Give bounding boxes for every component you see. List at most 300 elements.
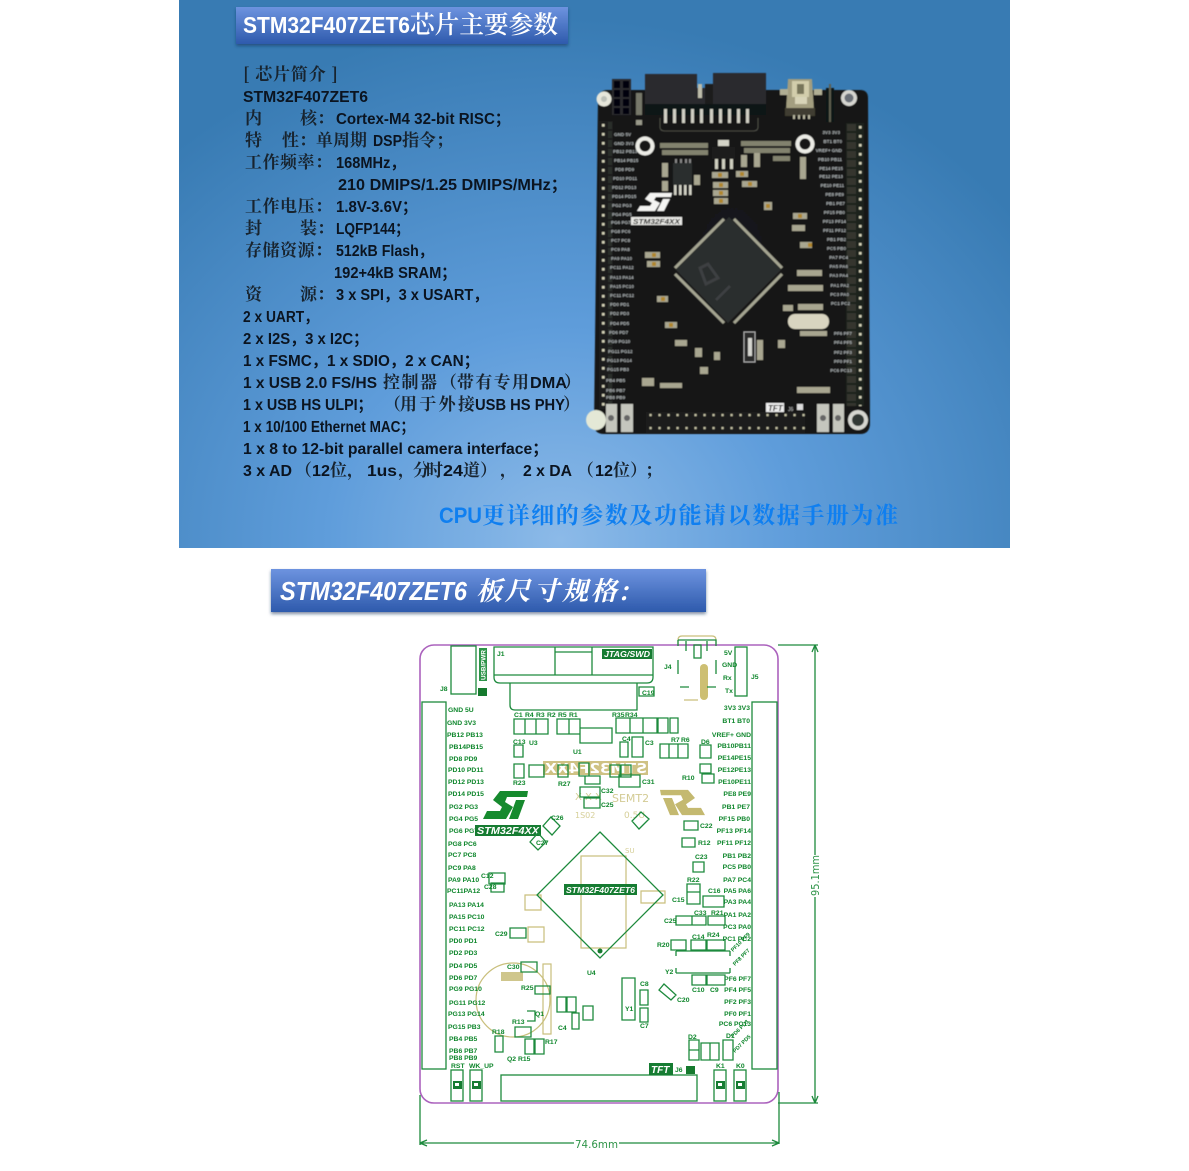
right header outline xyxy=(752,702,777,1069)
note: refer to the datasheet: 更详细的参数及功能请以数据手册为准 xyxy=(482,497,898,530)
left pin labels: PC7 PC8 xyxy=(611,238,631,243)
J5 connector: 5V xyxy=(724,650,733,657)
left pin labels: PG4 PG5 xyxy=(612,212,632,217)
text block: chip specifications: 性：单周期 xyxy=(282,126,367,151)
component reference labels: C1 xyxy=(514,712,523,719)
four-pin header xyxy=(826,84,834,122)
text block: chip specifications: 装： xyxy=(300,214,334,239)
component reference labels: R17 xyxy=(545,1039,558,1046)
text block: chip specifications: ； xyxy=(645,456,662,481)
right pin labels xyxy=(816,130,852,373)
text block: chip specifications: 2 x DA xyxy=(523,463,572,480)
left pin labels: PD4 PD5 xyxy=(449,963,478,970)
JTAG connector outline xyxy=(494,647,653,710)
left pin labels: PD6 PD7 xyxy=(449,975,478,982)
component reference labels: C4 xyxy=(622,736,631,743)
right pin labels: PB10PB11 xyxy=(717,743,751,750)
left pin labels: PC11PA12 xyxy=(447,888,480,895)
component reference labels: C30 xyxy=(507,964,520,971)
text block: chip specifications: 3 x AD xyxy=(243,463,292,480)
component reference labels: R13 xyxy=(512,1019,525,1026)
panel: chip parameters xyxy=(179,0,1010,548)
title: board dimensions: 板尺寸规格: xyxy=(476,571,629,608)
component reference labels: D6 xyxy=(701,739,710,746)
component reference labels xyxy=(481,690,735,1063)
component footprints xyxy=(489,687,733,1060)
right pin labels: PC1 PC2 xyxy=(723,936,751,943)
left pin labels: PC11 PA12 xyxy=(610,265,634,270)
gold silkscreen ghost layer: SEMT2 xyxy=(612,792,649,805)
left pin labels: PD8 PD9 xyxy=(449,756,478,763)
tact switches xyxy=(606,404,844,432)
right pin labels: PF15 PB0 xyxy=(824,210,845,215)
text block: chip specifications: 位 xyxy=(613,456,630,481)
component reference labels: C26 xyxy=(551,815,564,822)
buttons: RST xyxy=(451,1063,465,1070)
left pin labels: PB4 PB5 xyxy=(606,378,626,383)
right pin labels: PB1 PE7 xyxy=(722,804,750,811)
right pin labels: PA3 PA4 xyxy=(830,273,848,278)
left pin labels: PA13 PA14 xyxy=(610,275,634,280)
component reference labels: C19 xyxy=(642,690,655,697)
J5 connector: Rx xyxy=(723,675,732,682)
socket header xyxy=(612,79,642,125)
component reference labels: Q1 xyxy=(535,1011,544,1018)
right pin labels: PA7 PC4 xyxy=(829,255,848,260)
left pin labels: PD14 PD15 xyxy=(612,194,637,199)
buttons: K1 xyxy=(716,1063,725,1070)
main chip outline: STM32F407ZET6 xyxy=(566,885,635,895)
right pin labels: BT1 BT0 xyxy=(722,718,750,725)
gold silkscreen ghost layer: STM32F4XX xyxy=(545,762,647,777)
right pin labels: PF6 PF7 xyxy=(724,976,751,983)
text block: chip specifications: （ xyxy=(577,456,594,481)
right pin labels: PC5 PB0 xyxy=(723,864,751,871)
right pin labels: VREF+ GND xyxy=(816,148,843,153)
left pin labels: PC9 PA8 xyxy=(448,865,476,872)
gold silkscreen ghost layer: SU xyxy=(625,847,635,855)
J5 connector: Tx xyxy=(725,688,733,695)
left header outline xyxy=(422,702,446,1069)
left pin labels: GND 5V xyxy=(614,132,632,137)
left pin labels: PG9 PG10 xyxy=(608,339,631,344)
ST logo xyxy=(483,791,528,819)
left pin labels: PD2 PD3 xyxy=(610,311,630,316)
right pin labels xyxy=(712,705,752,1054)
right pin header xyxy=(846,123,864,406)
text block: chip specifications: STM32F407ZET6 xyxy=(243,89,368,106)
text block: chip specifications xyxy=(243,60,662,481)
component reference labels: C4 xyxy=(558,1025,567,1032)
text block: chip specifications: 指令； xyxy=(402,126,453,151)
left pin labels: PA9 PA10 xyxy=(448,877,479,884)
JTAG connector outline: JTAG/SWD xyxy=(604,650,650,659)
TFT label: TFT xyxy=(651,1065,670,1076)
left pin labels: PD8 PD9 xyxy=(615,167,635,172)
right pin labels: PE8 PE9 xyxy=(723,791,751,798)
component reference labels: C23 xyxy=(695,854,708,861)
text block: chip specifications: 工作电压： xyxy=(245,192,332,217)
text block: chip specifications: 封 xyxy=(245,214,262,239)
right pin labels: PF10 PF9 xyxy=(730,932,752,953)
J5 connector: GND xyxy=(722,662,737,669)
right pin labels: PF0 PF1 xyxy=(724,1011,751,1018)
text block: chip specifications: 特 xyxy=(245,126,262,151)
right pin labels: PF13 PF14 xyxy=(717,828,751,835)
component reference labels: R21 xyxy=(711,910,724,917)
J8 connector xyxy=(440,646,488,696)
left pin labels: PG15 PB3 xyxy=(607,367,629,372)
component reference labels: D2 xyxy=(688,1034,697,1041)
right pin labels: PE12 PE13 xyxy=(819,174,843,179)
text block: chip specifications: 192+4kB SRAM； xyxy=(334,265,456,282)
right pin labels: PB1 PE7 xyxy=(826,201,845,206)
J5 connector xyxy=(722,647,759,696)
note: refer to the datasheet: CPU xyxy=(439,503,482,528)
crystal xyxy=(788,314,829,329)
left pin labels: PD0 PD1 xyxy=(610,302,630,307)
TFT label xyxy=(766,403,803,413)
text block: chip specifications: DSP xyxy=(373,133,402,150)
right pin labels: PF11 PF12 xyxy=(717,840,751,847)
component reference labels: C25 xyxy=(664,918,677,925)
component reference labels: C25 xyxy=(601,802,614,809)
component reference labels: R5 xyxy=(558,712,567,719)
right pin labels: PE14PE15 xyxy=(718,755,751,762)
left pin labels: PA13 PA14 xyxy=(449,902,484,909)
text block: chip specifications: [ 芯片简介 ] xyxy=(243,60,338,85)
left pin labels: PG6 PG7 xyxy=(449,828,478,835)
component reference labels: C28 xyxy=(484,884,497,891)
component reference labels: C14 xyxy=(692,934,705,941)
mounting holes xyxy=(586,90,868,430)
text block: chip specifications: ） xyxy=(630,456,647,481)
text block: chip specifications: ， xyxy=(500,456,517,481)
right pin labels: PC6 PC13 xyxy=(719,1021,751,1028)
left pin labels: PG11 PG12 xyxy=(449,1000,485,1007)
right pin labels: PC3 PA0 xyxy=(723,924,751,931)
right pin labels: PA5 PA6 xyxy=(830,264,848,269)
photo: STM32F407ZET6 development board xyxy=(586,73,870,434)
buttons: K0 xyxy=(736,1063,745,1070)
left pin labels: PG6 PG7 xyxy=(611,220,631,225)
right pin labels: BT1 BT0 xyxy=(823,139,842,144)
right pin labels: PA1 PA2 xyxy=(831,283,849,288)
text block: chip specifications: 1 x 8 to 12-bit parallel camera interface； xyxy=(243,441,548,458)
right pin labels: PF8 PF7 xyxy=(732,948,752,967)
left pin labels: PC11 PC12 xyxy=(610,293,634,298)
text block: chip specifications: 24 xyxy=(443,463,463,480)
diagram: board layout drawing xyxy=(420,636,822,1151)
ST logo xyxy=(637,193,672,211)
left pin labels: PB12 PB13 xyxy=(447,732,483,739)
component reference labels: C15 xyxy=(672,897,685,904)
right pin labels: PF11 PF12 xyxy=(823,228,846,233)
voltage regulator xyxy=(712,140,735,169)
component reference labels: C7 xyxy=(640,1023,649,1030)
dimension: width 74.6 mm xyxy=(420,1092,779,1151)
dimension: width 74.6 mm: 74.6mm xyxy=(575,1138,618,1151)
component reference labels: C31 xyxy=(642,779,655,786)
left pin labels: PD0 PD1 xyxy=(449,938,478,945)
text block: chip specifications: LQFP144； xyxy=(336,221,409,238)
right pin labels: PF2 PF3 xyxy=(834,350,852,355)
text block: chip specifications: 2 x UART， xyxy=(243,309,318,326)
right pin labels: PC1 PC2 xyxy=(831,301,850,306)
left pin labels: PD12 PD13 xyxy=(448,779,484,786)
component reference labels: U3 xyxy=(529,740,538,747)
right pin labels: PB1 PB2 xyxy=(827,237,846,242)
component reference labels: R6 xyxy=(681,737,690,744)
component reference labels: C10 xyxy=(692,987,705,994)
bottom header outline xyxy=(501,1075,697,1101)
right pin labels: VREF+ GND xyxy=(712,732,751,739)
right pin labels: PF2 PF3 xyxy=(724,999,751,1006)
right pin labels: PF6 PF7 xyxy=(834,331,852,336)
STM32F4XX label: STM32F4XX xyxy=(477,826,540,837)
TFT label: J6 xyxy=(788,407,794,413)
left pin labels: PC9 PA8 xyxy=(611,247,630,252)
main chip outline xyxy=(537,832,663,977)
right pin labels: PB1 PB2 xyxy=(723,853,751,860)
J8 connector: USB/PWR xyxy=(482,649,488,680)
text block: chip specifications: 道 xyxy=(463,456,480,481)
component reference labels: C9 xyxy=(710,987,719,994)
dimension: height 95.1 mm: 95.1mm xyxy=(809,855,822,896)
right pin labels: PF4 PF5 xyxy=(724,987,751,994)
left pin labels: PG8 PC6 xyxy=(448,841,477,848)
left pin labels: PG13 PG14 xyxy=(607,358,632,363)
component reference labels: C22 xyxy=(700,823,713,830)
left pin labels: PA15 PC10 xyxy=(449,914,485,921)
right pin labels: PE12PE13 xyxy=(718,767,751,774)
right pin labels: PE8 PE9 xyxy=(825,192,844,197)
left pin labels: PB4 PB5 xyxy=(449,1036,478,1043)
right pin labels: PE14 PE15 xyxy=(819,166,843,171)
left pin labels: PB14 PB15 xyxy=(614,158,639,163)
left pin labels: PC11 PC12 xyxy=(449,926,485,933)
mini USB outline xyxy=(664,640,716,687)
left pin labels: PD10 PD11 xyxy=(613,176,637,181)
text block: chip specifications: 1.8V-3.6V； xyxy=(336,199,417,216)
mini USB connector xyxy=(780,79,822,119)
text block: chip specifications: （ xyxy=(440,368,457,393)
text block: chip specifications: 源： xyxy=(300,280,334,305)
component reference labels: C3 xyxy=(645,740,654,747)
right pin labels: PA7 PC4 xyxy=(723,877,751,884)
left pin labels: PB8 PB9 xyxy=(449,1055,478,1062)
component reference labels: C27 xyxy=(536,840,549,847)
title: chip main parameters xyxy=(236,6,568,44)
left pin labels: PG2 PG3 xyxy=(612,203,632,208)
JTAG connector xyxy=(645,73,766,131)
component reference labels: R22 xyxy=(687,877,700,884)
component reference labels: R3 xyxy=(536,712,545,719)
left pin labels: PG11 PG12 xyxy=(608,349,633,354)
right pin labels: PA1 PA2 xyxy=(724,912,751,919)
main chip xyxy=(675,217,782,323)
left pin labels: PB12 PB13 xyxy=(613,149,638,154)
right pin labels: PC5 PB0 xyxy=(827,246,846,251)
component reference labels: R24 xyxy=(707,932,720,939)
text block: chip specifications: 1us xyxy=(367,463,397,480)
right pin labels: 3V3 3V3 xyxy=(822,130,840,135)
text block: chip specifications: 2 x I2S，3 x I2C； xyxy=(243,331,368,348)
component reference labels: Q2 R15 xyxy=(507,1056,531,1063)
left pin labels: PG15 PB3 xyxy=(448,1024,481,1031)
text block: chip specifications: 核： xyxy=(300,104,334,129)
left pin labels: GND 5U xyxy=(448,707,474,714)
left pin labels: PD12 PD13 xyxy=(612,185,637,190)
left pin labels: PA15 PC10 xyxy=(610,284,634,289)
text block: chip specifications: 12 xyxy=(312,463,330,480)
JTAG connector outline: J1 xyxy=(497,651,505,658)
text block: chip specifications: 控制器 xyxy=(383,368,437,393)
text block: chip specifications: （ xyxy=(384,390,401,415)
text block: chip specifications: 资 xyxy=(245,280,264,305)
left pin labels: GND 3V3 xyxy=(614,141,634,146)
left pin labels: PB14PB15 xyxy=(449,744,483,751)
TFT label: J6 xyxy=(675,1067,683,1074)
J5 connector: J5 xyxy=(751,674,759,681)
text block: chip specifications: USB HS PHY xyxy=(475,397,565,414)
right pin labels: PF4 PF5 xyxy=(834,340,852,345)
left pin labels: PG2 PG3 xyxy=(449,804,478,811)
text block: chip specifications: 存储资源： xyxy=(245,236,332,261)
board label xyxy=(631,217,682,226)
left pin labels: PG9 PG10 xyxy=(449,986,482,993)
main chip outline: U4 xyxy=(587,970,596,977)
component reference labels: R25 xyxy=(521,985,534,992)
component reference labels: R4 xyxy=(525,712,534,719)
text block: chip specifications: 1 x FSMC，1 x SDIO，2 x CAN； xyxy=(243,353,479,370)
component reference labels: C16 xyxy=(708,888,721,895)
left pin labels: PC7 PC8 xyxy=(448,852,477,859)
text block: chip specifications: 1 x 10/100 Ethernet MAC； xyxy=(243,419,414,436)
right pin labels: PC3 PA0 xyxy=(830,292,849,297)
text block: chip specifications: 带有专用 xyxy=(456,368,529,393)
left pin labels: PD14 PD15 xyxy=(448,791,484,798)
text block: chip specifications: 3 x SPI，3 x USART， xyxy=(336,287,488,304)
buttons xyxy=(451,1063,746,1101)
text block: chip specifications: 512kB Flash， xyxy=(336,243,433,260)
gold silkscreen ghost layer: 1S02 xyxy=(575,811,595,820)
component reference labels: R2 xyxy=(547,712,556,719)
left pin labels: PD10 PD11 xyxy=(448,767,484,774)
right pin labels: PD7 PD5 xyxy=(732,1034,752,1054)
right pin labels: PC6 PC13 xyxy=(830,368,852,373)
component reference labels: C13 xyxy=(513,739,526,746)
right pin labels: PF15 PB0 xyxy=(719,816,750,823)
text block: chip specifications: ） xyxy=(480,456,497,481)
component reference labels: C32 xyxy=(601,788,614,795)
component reference labels: R35 xyxy=(612,712,625,719)
vertical crystal xyxy=(744,332,755,362)
component reference labels: C8 xyxy=(640,981,649,988)
text block: chip specifications: 分时 xyxy=(413,456,443,481)
component reference labels: C33 xyxy=(694,910,707,917)
component reference labels: C12 xyxy=(481,873,494,880)
left pin labels xyxy=(606,132,639,400)
text block: chip specifications: ， xyxy=(398,456,415,481)
left pin labels: PB6 PB7 xyxy=(449,1048,478,1055)
component reference labels: R10 xyxy=(682,775,695,782)
component reference labels: R20 xyxy=(657,942,670,949)
text block: chip specifications: 168MHz， xyxy=(336,155,405,172)
text block: chip specifications: ） xyxy=(563,390,580,415)
text block: chip specifications: ） xyxy=(564,368,581,393)
right pin labels: PE10 PE11 xyxy=(820,183,844,188)
text block: chip specifications: 内 xyxy=(245,104,262,129)
TFT label: TFT xyxy=(768,404,784,413)
text block: chip specifications: 1 x USB 2.0 FS/HS xyxy=(243,375,377,392)
text block: chip specifications: 210 DMIPS/1.25 DMIPS/MHz； xyxy=(338,177,567,194)
J8 connector: J8 xyxy=(440,686,448,693)
component reference labels: C20 xyxy=(677,997,690,1004)
text block: chip specifications: DMA xyxy=(530,375,567,392)
passive components xyxy=(642,141,830,393)
left pin labels: GND 3V3 xyxy=(447,720,476,727)
component reference labels: D1 xyxy=(726,1033,735,1040)
component reference labels: U1 xyxy=(573,749,582,756)
text block: chip specifications: （ xyxy=(295,456,312,481)
buttons: WK_UP xyxy=(469,1063,494,1070)
left pin labels: PD2 PD3 xyxy=(449,950,478,957)
component reference labels: R7 xyxy=(671,737,680,744)
title: chip main parameters: 芯片主要参数 xyxy=(409,6,559,41)
left pin labels: PG8 PC6 xyxy=(611,229,631,234)
component reference labels: R34 xyxy=(625,712,638,719)
gold silkscreen ghost layer: X X X xyxy=(575,792,602,803)
right pin labels: PA3 PA4 xyxy=(724,899,751,906)
left pin labels: PB6 PB7 xyxy=(606,388,626,393)
gold silkscreen ghost layer xyxy=(476,636,716,1037)
component reference labels: Y1 xyxy=(625,1006,634,1013)
component reference labels: Y2 xyxy=(665,969,674,976)
left pin labels xyxy=(447,707,485,1062)
title: board dimensions xyxy=(271,569,706,612)
left pin labels: PB8 PB9 xyxy=(606,395,626,400)
dimension: height 95.1 mm xyxy=(778,645,822,1103)
right pin labels: 3V3 3V3 xyxy=(724,705,750,712)
title: chip main parameters: STM32F407ZET6 xyxy=(243,12,410,38)
component reference labels: C29 xyxy=(495,931,508,938)
component reference labels: R27 xyxy=(558,781,571,788)
left pin header xyxy=(599,121,613,409)
left pin labels: PD6 PD7 xyxy=(609,330,629,335)
left pin labels: PG13 PG14 xyxy=(448,1011,485,1018)
left pin labels: PA9 PA10 xyxy=(611,256,632,261)
left pin labels: PD4 PD5 xyxy=(610,321,630,326)
TFT label xyxy=(649,1063,695,1076)
text block: chip specifications: 位， xyxy=(330,456,364,481)
right pin labels: PE10PE11 xyxy=(718,779,751,786)
bottom pin header xyxy=(646,412,805,433)
component reference labels: R12 xyxy=(698,840,711,847)
component reference labels: R1 xyxy=(569,712,578,719)
right pin labels: PA5 PA6 xyxy=(724,888,751,895)
gold silkscreen ghost layer: 0.5U xyxy=(624,811,645,821)
board label: STM32F4XX xyxy=(633,219,682,226)
mini USB outline: J4 xyxy=(664,664,672,671)
left pin labels: PG4 PG5 xyxy=(449,816,478,823)
board outline xyxy=(420,645,778,1103)
text block: chip specifications: 用于外接 xyxy=(400,390,476,415)
right pin labels: PF13 PF14 xyxy=(823,219,846,224)
right pin labels: PB10 PB11 xyxy=(818,157,842,162)
small chip xyxy=(673,159,692,195)
right pin labels: PD6 PD3 xyxy=(730,1019,750,1039)
